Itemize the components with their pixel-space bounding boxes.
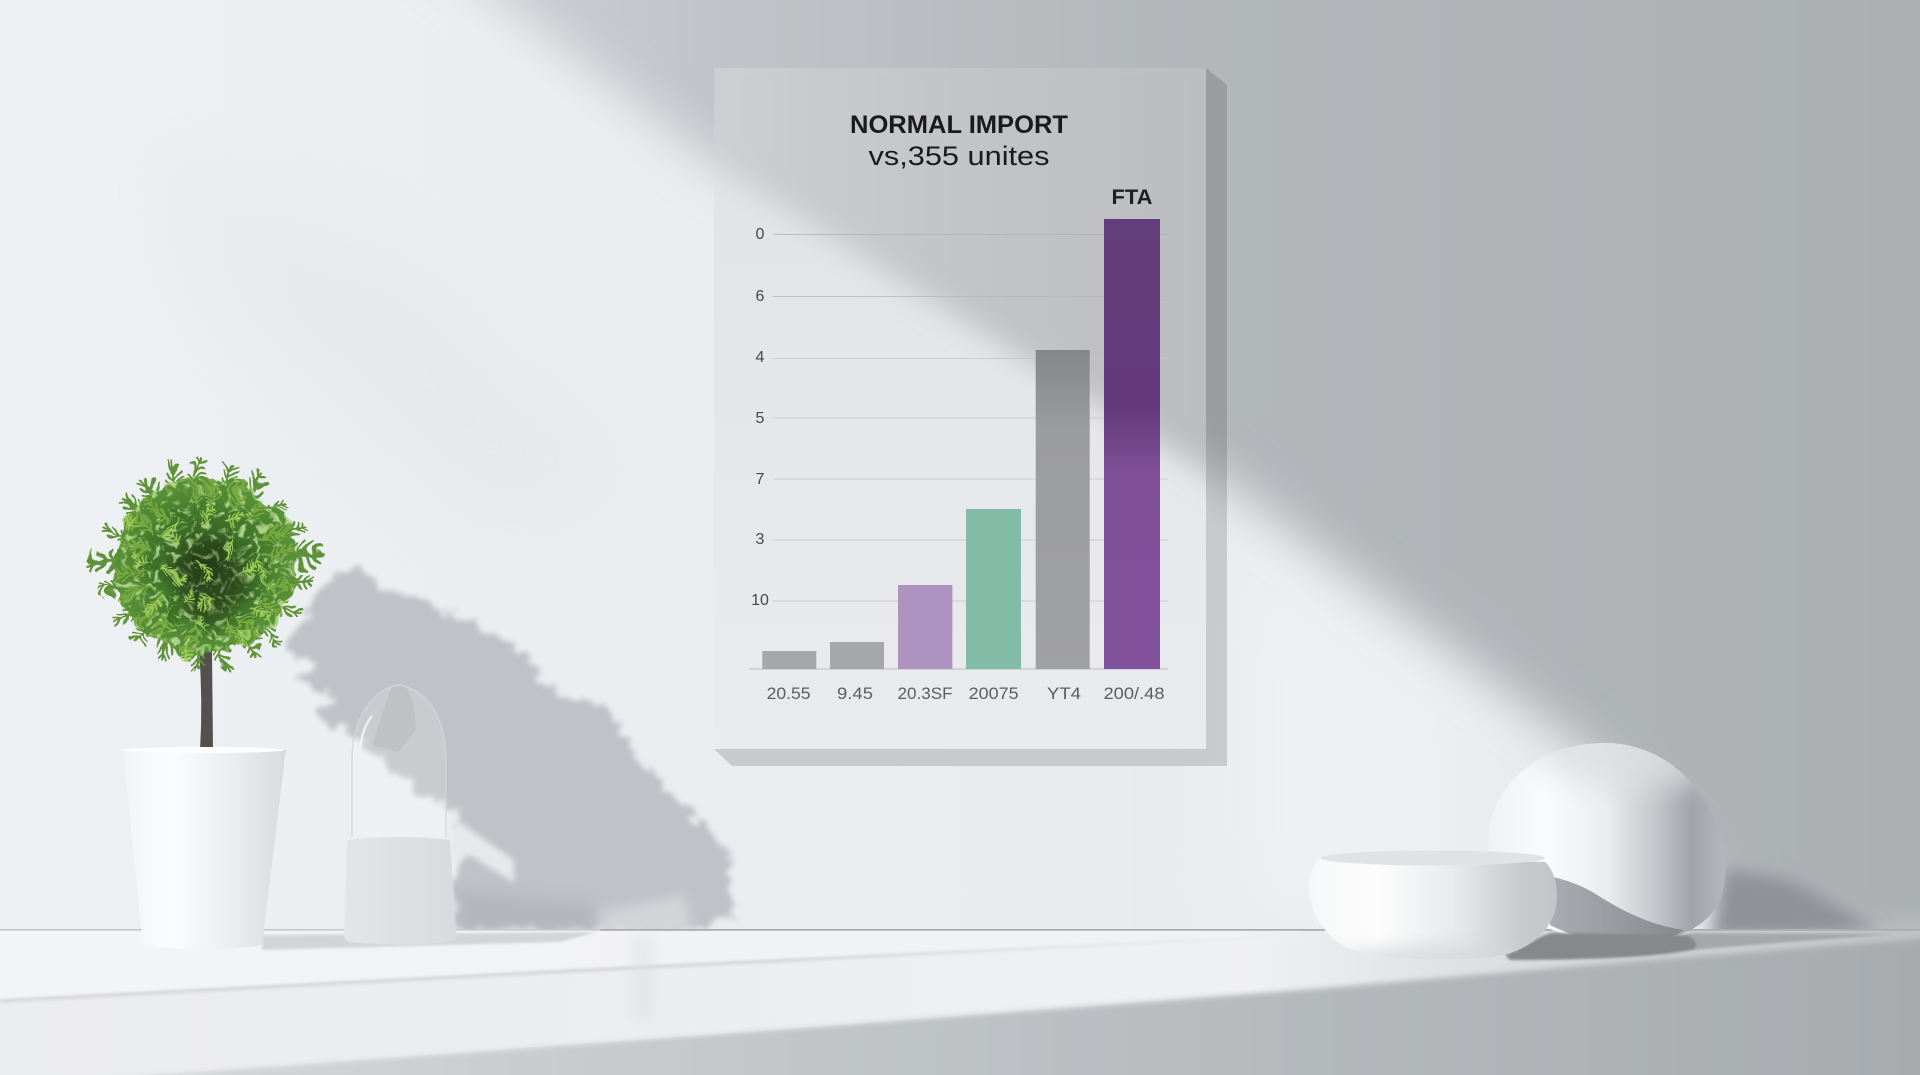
y-axis labels: 10 (751, 592, 769, 609)
glass dome (352, 685, 446, 837)
chart title: NORMAL IMPORT (850, 111, 1068, 139)
y-axis labels: 4 (756, 349, 765, 366)
gridlines (749, 234, 1168, 669)
x-axis labels: 20.55 (767, 685, 811, 703)
y-axis labels: 6 (756, 288, 765, 305)
x-axis labels: 200/.48 (1104, 685, 1164, 703)
x-axis labels: 9.45 (837, 685, 873, 703)
panel drop shadow (714, 68, 1227, 766)
sphere ornament (1500, 743, 1725, 936)
y-axis labels: 3 (756, 531, 765, 548)
crown (88, 457, 324, 672)
x-axis labels: 20075 (969, 685, 1019, 703)
floor (0, 929, 1920, 1075)
bowl shadow on sphere (1550, 877, 1684, 943)
trunk (199, 650, 213, 751)
highlighted bar label: FTA (1112, 186, 1152, 209)
chart title (850, 111, 1068, 171)
glass vase on base (344, 685, 456, 944)
potted tree (88, 457, 324, 950)
x-axis labels: YT4 (1047, 685, 1081, 703)
y-axis labels: 7 (756, 471, 765, 488)
white bowl ornament (1309, 850, 1557, 956)
bar chart (762, 219, 1160, 669)
panel light band shadow (714, 68, 1206, 486)
wall background (486, 0, 1920, 929)
chart panel (714, 68, 1206, 699)
planter pot (123, 747, 286, 950)
y-axis labels: 5 (756, 410, 765, 427)
floor shadow under bowl (1505, 933, 1696, 960)
x-axis labels: 20.3SF (898, 685, 952, 703)
chart title: vs,355 unites (868, 141, 1050, 171)
tree shadow on wall (284, 565, 735, 935)
x-axis labels (767, 685, 1164, 703)
y-axis labels (751, 226, 769, 609)
y-axis labels: 0 (756, 226, 765, 243)
vase base (344, 837, 456, 944)
